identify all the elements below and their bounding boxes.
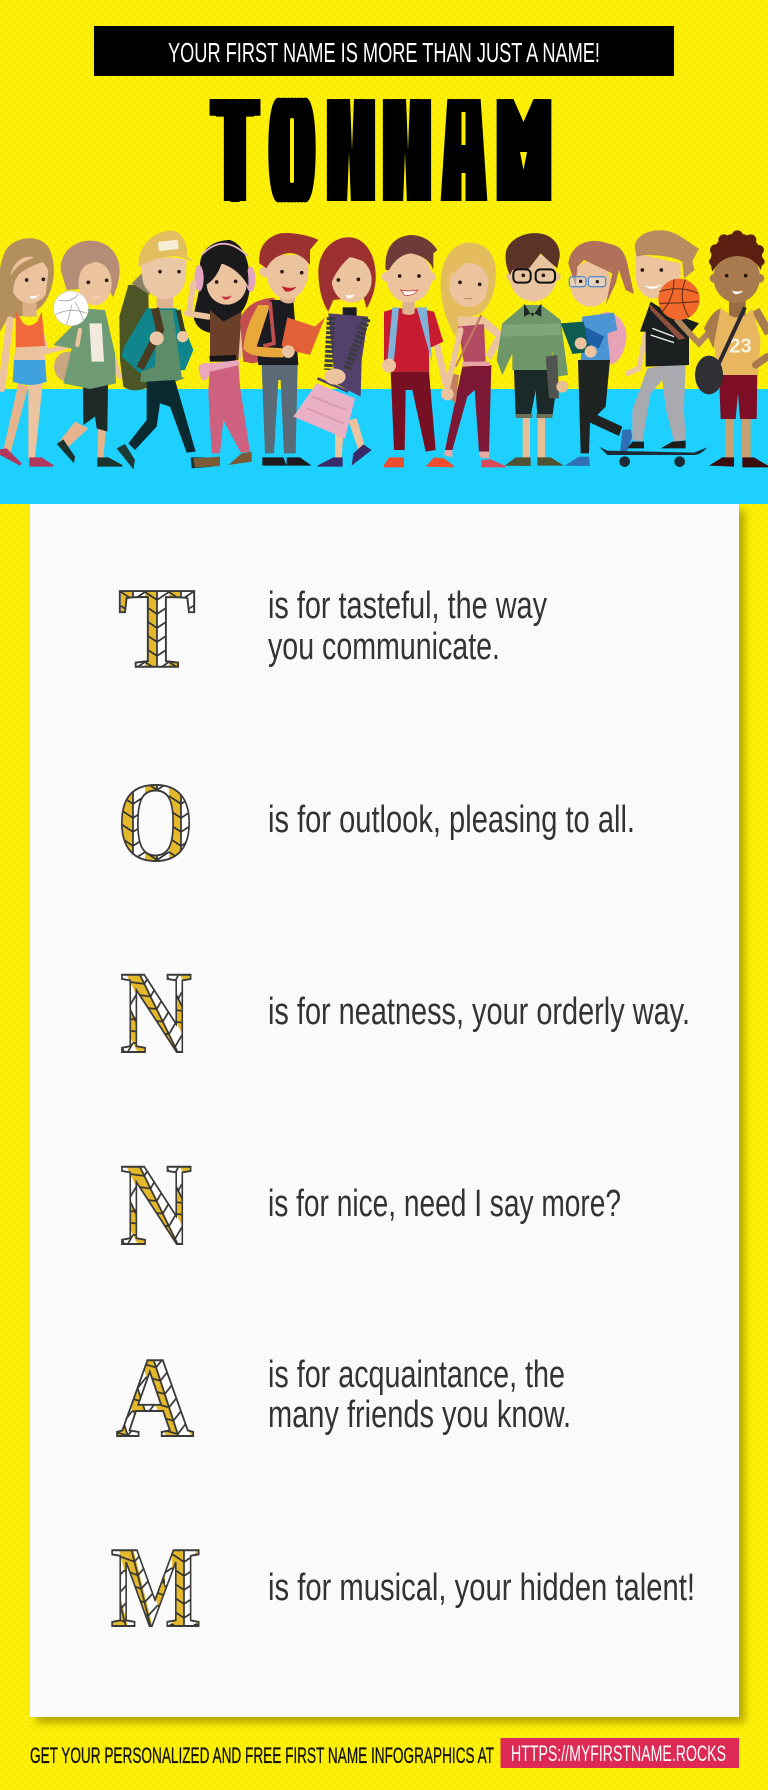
person 8: blonde girl with shoulder bag: [441, 243, 506, 467]
description T: you communicate.: [268, 626, 500, 668]
letter M: M: [110, 1524, 202, 1651]
footer call to action: GET YOUR PERSONALIZED AND FREE FIRST NAME INFOGRAPHICS AT: [30, 1743, 494, 1768]
row: T: [118, 565, 547, 692]
person 2: girl with volleyball: [53, 241, 122, 467]
letter A: A: [116, 1334, 194, 1461]
title: name in heavy condensed black letters: M: [511, 68, 536, 233]
person 9: boy with glasses and green sweater: [497, 233, 568, 466]
person 11: boy on skateboard with basketball: [599, 230, 717, 467]
illustration: row of young people, right half: [382, 230, 768, 467]
letter O: O: [117, 760, 194, 885]
description A: is for acquaintance, the: [268, 1354, 565, 1396]
row: O: [117, 760, 635, 885]
person 6: girl with pink bag: [293, 237, 376, 467]
letter M: [111, 1549, 200, 1627]
person 12: boy in yellow tank top: [695, 230, 768, 467]
person 10: girl with ponytail and tablet: [561, 241, 634, 466]
illustration: row of young people, left half: [0, 231, 376, 469]
description T: is for tasteful, the way: [268, 585, 547, 627]
title: name in heavy condensed black letters: O: [280, 68, 304, 233]
title letter counters: thin slits in the heavy letters: [290, 98, 534, 204]
row: A: [116, 1334, 571, 1461]
title: name in heavy condensed black letters: A: [454, 68, 474, 233]
description O: is for outlook, pleasing to all.: [268, 799, 635, 841]
row: first N: [120, 947, 690, 1078]
person 3: backpacker with cap: [117, 231, 213, 469]
letter T: T: [118, 565, 196, 692]
row: second N: [120, 1139, 621, 1270]
footer: [30, 1738, 739, 1768]
description A: many friends you know.: [268, 1394, 571, 1436]
jersey number: 23: [729, 336, 752, 358]
person 1: girl in orange top: [0, 238, 78, 467]
row: M: [111, 1549, 692, 1627]
black banner: [94, 26, 674, 76]
letter M: M: [110, 1524, 202, 1651]
person 4: girl with headphones: [187, 240, 255, 467]
title: name in heavy condensed black letters: N: [396, 68, 417, 233]
person 7: boy in red shirt: [382, 235, 454, 467]
description N: is for nice, need I say more?: [268, 1183, 621, 1225]
blue floor band: [0, 389, 768, 504]
person 5: boy reading a book: [240, 233, 325, 466]
title: name in heavy condensed black letters: T: [215, 68, 255, 233]
letter N: N: [120, 947, 192, 1078]
title: name in heavy condensed black letters: N: [340, 68, 361, 233]
letter N: N: [120, 1139, 192, 1270]
title: name in heavy condensed black letters: [210, 68, 552, 233]
white content panel: [30, 504, 739, 1717]
